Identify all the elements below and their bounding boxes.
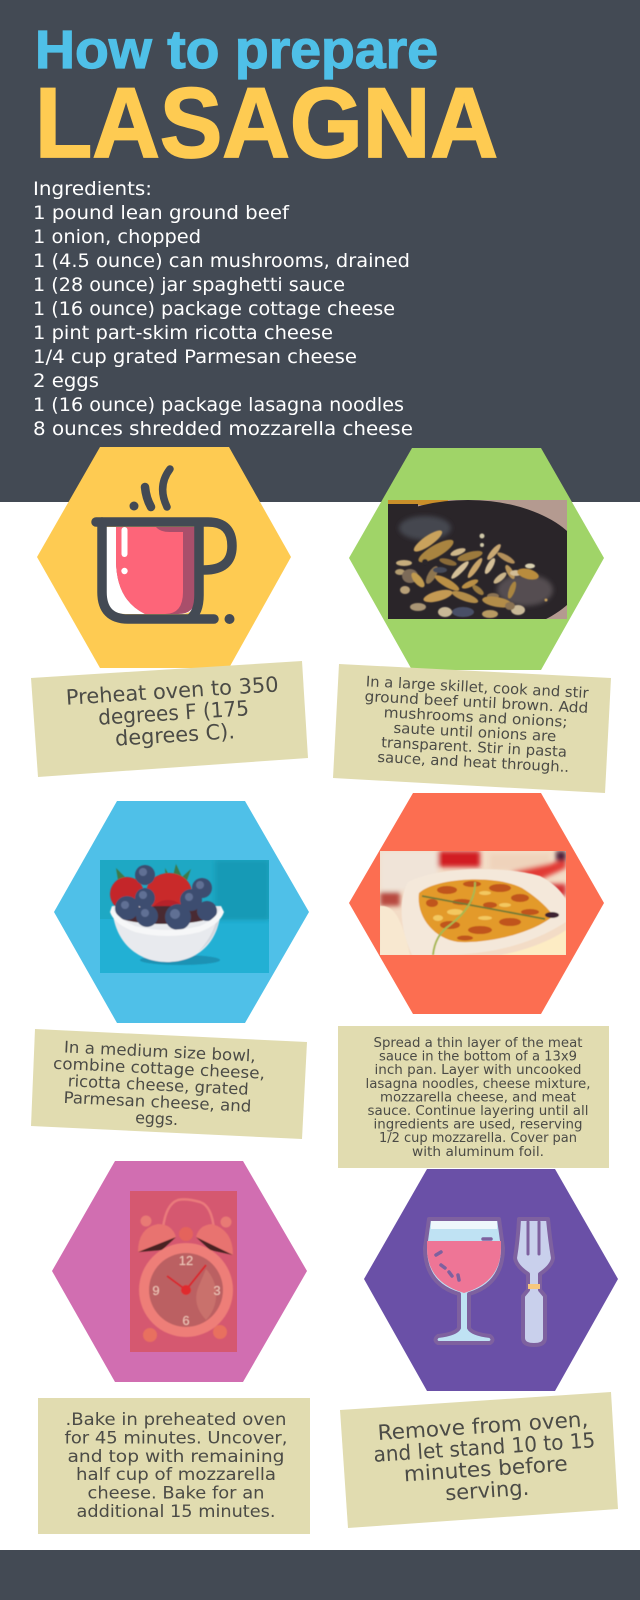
icon: steaming mug: [96, 469, 234, 624]
caption: step 5: additional 15 minutes.: [76, 1502, 276, 1522]
caption: step 6: [340, 1392, 618, 1528]
ingredients list: 1 pound lean ground beef: [33, 202, 290, 224]
ingredients list: 1 pint part-skim ricotta cheese: [33, 322, 333, 344]
caption: step 5: for 45 minutes. Uncover,: [64, 1428, 288, 1448]
purple hexagon: [364, 1169, 618, 1391]
green hexagon: [349, 448, 604, 670]
ingredients list: 1 onion, chopped: [33, 226, 201, 248]
photo: mushrooms in skillet: [388, 500, 567, 619]
caption: step 3: eggs.: [135, 1108, 179, 1129]
photo: pink alarm clock: 6: [182, 1313, 190, 1328]
caption: step 6: serving.: [444, 1476, 530, 1505]
footer band: [0, 1550, 640, 1600]
caption: step 3: ricotta cheese, grated: [67, 1071, 249, 1099]
caption: step 3: [31, 1029, 307, 1139]
photo: baked lasagna in dish: [380, 851, 566, 955]
blue hexagon: [54, 801, 309, 1023]
photo: pink alarm clock: [130, 1191, 237, 1352]
fork: [515, 1219, 553, 1345]
caption: step 2: sauce, and heat through..: [377, 750, 570, 776]
caption: step 1: [31, 661, 308, 777]
caption: step 3: combine cottage cheese,: [53, 1054, 265, 1083]
pink hexagon: [52, 1161, 307, 1382]
ingredients list: Ingredients:: [33, 178, 152, 200]
photo: pink alarm clock: 9: [152, 1283, 160, 1298]
caption: step 4: mozzarella cheese, and meat: [380, 1090, 576, 1105]
panel: step 5 bake: [52, 1161, 307, 1382]
photo: pink alarm clock: 12: [179, 1253, 193, 1268]
title: [35, 20, 498, 178]
panel: step 3 mix cheese: [54, 801, 309, 1023]
wine glass: [425, 1219, 503, 1343]
panel: step 4 layer lasagna: [349, 793, 604, 1014]
caption: step 2: [333, 664, 611, 793]
icon: wine glass and fork: [425, 1219, 553, 1345]
caption: step 5: and top with remaining: [67, 1447, 285, 1467]
caption: step 4: sauce in the bottom of a 13x9: [379, 1050, 577, 1065]
photo: pink alarm clock: 3: [213, 1283, 221, 1298]
caption: step 5: [38, 1398, 310, 1534]
orange hexagon: [349, 793, 604, 1014]
caption: step 6: Remove from oven,: [377, 1407, 589, 1445]
caption: step 4: ingredients are used, reserving: [374, 1118, 582, 1133]
caption: step 4: inch pan. Layer with uncooked: [375, 1063, 581, 1078]
caption: step 5: .Bake in preheated oven: [66, 1410, 286, 1430]
header band: [0, 0, 640, 502]
ingredients list: 1 (16 ounce) package lasagna noodles: [33, 394, 404, 416]
caption: step 3: Parmesan cheese, and: [63, 1088, 252, 1116]
ingredients list: [33, 178, 413, 440]
caption: step 4: 1/2 cup mozzarella. Cover pan: [379, 1131, 577, 1146]
caption: step 1: degrees C).: [114, 719, 236, 751]
caption: step 4: lasagna noodles, cheese mixture,: [366, 1077, 590, 1092]
yellow hexagon: [37, 447, 291, 668]
caption: step 5: half cup of mozzarella: [76, 1465, 276, 1485]
ingredients list: 8 ounces shredded mozzarella cheese: [33, 418, 413, 440]
caption: step 2: mushrooms and onions;: [383, 705, 568, 731]
caption: step 4: Spread a thin layer of the meat: [374, 1036, 582, 1051]
ingredients list: 1 (16 ounce) package cottage cheese: [33, 298, 395, 320]
caption: step 1: degrees F (175: [97, 696, 250, 730]
caption: step 5: cheese. Bake for an: [88, 1484, 264, 1504]
panel: step 6 rest and serve: [364, 1169, 618, 1391]
caption: step 1: Preheat oven to 350: [65, 672, 279, 710]
photo: bowl of berries: [100, 860, 269, 973]
title line: lasagna: LASAGNA: [35, 67, 498, 178]
ingredients list: 1/4 cup grated Parmesan cheese: [33, 346, 357, 368]
ingredients list: 1 (28 ounce) jar spaghetti sauce: [33, 274, 345, 296]
caption: step 6: and let stand 10 to 15: [373, 1428, 596, 1467]
caption: step 4: [338, 1026, 609, 1168]
caption: step 4: sauce. Continue layering until all: [367, 1104, 589, 1119]
ingredients list: 2 eggs: [33, 370, 99, 392]
panel: step 2 cook beef: [349, 448, 604, 670]
caption: step 4: with aluminum foil.: [412, 1145, 544, 1160]
panel: step 1 preheat: [37, 447, 291, 668]
title line: how to prepare: How to prepare: [35, 20, 438, 80]
ingredients list: 1 (4.5 ounce) can mushrooms, drained: [33, 250, 410, 272]
caption: step 2: saute until onions are: [393, 721, 557, 745]
caption: step 6: minutes before: [403, 1452, 568, 1486]
caption: step 2: transparent. Stir in pasta: [381, 735, 567, 761]
caption: step 2: In a large skillet, cook and stir: [365, 674, 589, 702]
caption: step 3: In a medium size bowl,: [64, 1037, 256, 1065]
caption: step 2: ground beef until brown. Add: [364, 689, 589, 717]
